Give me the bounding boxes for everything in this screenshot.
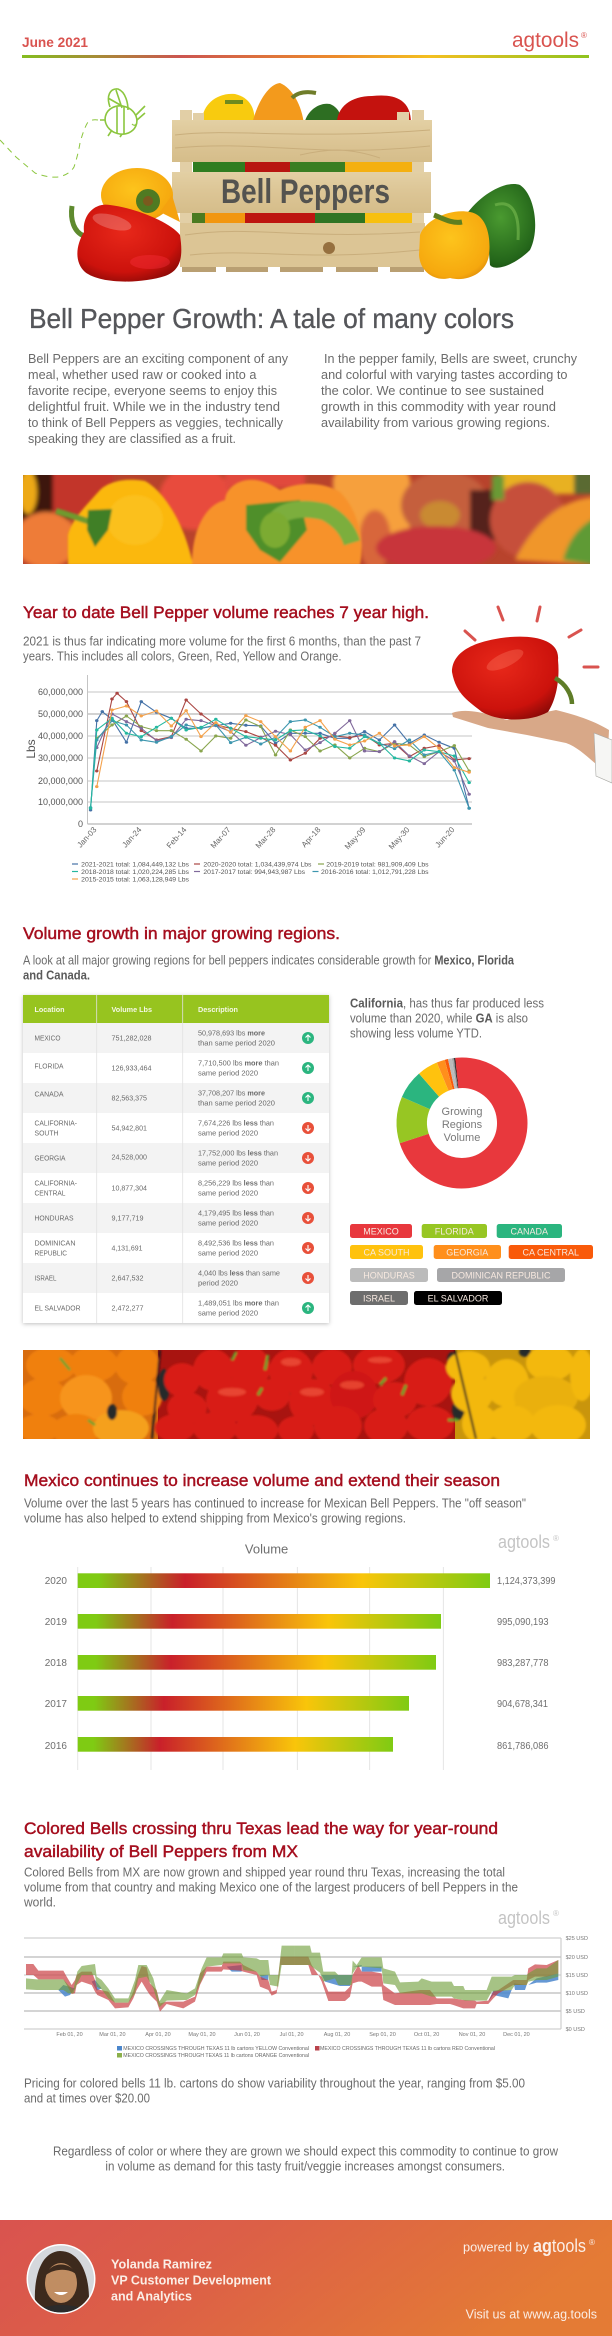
description column: than same period 2020 — [198, 1040, 275, 1048]
description column: than same period 2020 — [198, 1100, 275, 1108]
illustration: hand holding red pepper — [452, 607, 612, 783]
location column: SOUTH — [34, 1130, 58, 1138]
y axis labels — [38, 687, 83, 829]
area chart: carton pricing — [24, 1908, 588, 2059]
section text: growing regions: A look at all major growing regions for bell peppers indicates considerable growth for Mexico, Florida — [23, 954, 515, 968]
header rule — [22, 55, 589, 58]
volume column: 24,528,000 — [112, 1154, 147, 1162]
yellow peppers — [444, 1350, 590, 1439]
section base colours — [23, 1350, 590, 1439]
chart legend: 2016-2016 total: 1,012,791,228 Lbs — [321, 869, 429, 876]
donut legend pills: GEORGIA — [446, 1247, 488, 1257]
y axis labels: 0 — [78, 819, 83, 829]
author name and role: VP Customer Development — [111, 2274, 272, 2288]
header — [22, 29, 589, 58]
description column: 8,492,536 lbs less than — [198, 1240, 274, 1248]
closing statement: Regardless of color or where they are grown we should expect this commodity to continue to grow — [53, 2144, 559, 2158]
crate label: Bell Peppers — [221, 173, 390, 211]
chart legend — [117, 2046, 495, 2059]
x axis labels: Sep 01, 20 — [369, 2032, 396, 2038]
x axis labels: Oct 01, 20 — [414, 2032, 439, 2038]
volume column: 4,131,691 — [112, 1246, 143, 1252]
pepper — [452, 637, 559, 720]
description column: 17,752,000 lbs less than — [198, 1150, 278, 1158]
chart legend: 2015-2015 total: 1,063,128,949 Lbs — [81, 876, 189, 884]
description column: same period 2020 — [198, 1190, 258, 1198]
volume column: 54,942,801 — [112, 1126, 147, 1132]
price bands: January to June — [26, 1946, 295, 2012]
dark gaps — [107, 1347, 531, 1420]
location column: REPUBLIC — [34, 1250, 67, 1258]
x axis labels: Feb-14 — [165, 825, 189, 850]
description column: same period 2020 — [198, 1160, 258, 1168]
hero image: crate of bell peppers — [72, 83, 535, 282]
description column: 8,256,229 lbs less than — [198, 1180, 274, 1188]
watermark: ® — [553, 1534, 559, 1543]
x axis labels: Jan-24 — [120, 825, 144, 850]
author name and role: and Analytics — [111, 2290, 192, 2304]
x axis labels: Mar 01, 20 — [99, 2032, 126, 2038]
donut legend pills: HONDURAS — [363, 1270, 415, 1280]
description column: 7,710,500 lbs more than — [198, 1060, 279, 1068]
x axis labels: Jan-03 — [75, 825, 99, 850]
y axis labels: 60,000,000 — [38, 687, 83, 697]
chart legend: MEXICO CROSSINGS THROUGH TEXAS 11 lb cartons RED Conventional — [320, 2046, 495, 2052]
x axis labels: Nov 01, 20 — [459, 2032, 485, 2038]
icon: bee with dashed flight path — [0, 89, 145, 177]
description column — [198, 1030, 280, 1318]
powered by logo: agtools — [533, 2236, 586, 2256]
section text: year to date: 2021 is thus far indicating more volume for the first 6 months, than the past 7 — [23, 634, 421, 648]
table header — [23, 995, 329, 1023]
donut centre label: Volume — [444, 1132, 480, 1144]
x axis labels: May-30 — [387, 825, 412, 851]
location column: EL SALVADOR — [34, 1306, 80, 1312]
x axis labels: Aug 01, 20 — [324, 2032, 350, 2038]
section text: Texas crossings: world. — [23, 1896, 56, 1910]
author name and role: Yolanda Ramirez — [111, 2258, 212, 2272]
intro text: right column — [321, 351, 577, 430]
chart legend: MEXICO CROSSINGS THROUGH TEXAS 11 lb cartons YELLOW Conventional — [123, 2046, 309, 2052]
author photo — [26, 2244, 96, 2314]
intro text: right column: and colorful with varying tastes according to — [321, 367, 568, 382]
chart axes and grid — [88, 675, 472, 824]
table body — [23, 995, 329, 1323]
location column: CALIFORNIA- — [34, 1180, 78, 1188]
intro text: left column: delightful fruit. While we in the industry tend — [28, 399, 280, 414]
pricing note — [24, 2076, 525, 2106]
pepper highlight — [484, 645, 526, 675]
photo banner: close-up peppers — [23, 475, 590, 564]
powered by logo: powered by — [463, 2240, 529, 2254]
y axis labels: $10 USD — [566, 1991, 588, 1997]
green pepper — [466, 184, 535, 268]
main title: Bell Pepper Growth: A tale of many colors — [29, 303, 514, 334]
section text: growing regions: and Canada. — [23, 968, 90, 982]
watermark: agtools — [498, 1532, 550, 1552]
y axis labels: $25 USD — [566, 1936, 588, 1942]
chart legend: 2019-2019 total: 981,909,409 Lbs — [326, 862, 429, 868]
trend icons — [302, 1032, 314, 1314]
value labels: 1,124,373,399 — [497, 1576, 556, 1587]
volume column: 751,282,028 — [112, 1036, 152, 1042]
section heading: year to date: Year to date Bell Pepper volume reaches 7 year high. — [23, 603, 429, 622]
pepper stem — [555, 678, 572, 704]
x axis labels: May-09 — [343, 825, 368, 851]
section text: Mexico — [24, 1496, 526, 1526]
x axis labels: Mar-07 — [209, 825, 233, 850]
volume column: 2,647,532 — [112, 1276, 144, 1282]
peppers visible through slats — [192, 160, 412, 224]
intro text: right column: availability from various growing regions. — [321, 415, 550, 430]
intro text: left column: Bell Peppers are an exciting component of any — [28, 351, 288, 366]
description column: same period 2020 — [198, 1250, 258, 1258]
x axis labels: Jun 01, 20 — [234, 2032, 260, 2038]
section text: Mexico: Volume over the last 5 years has continued to increase for Mexican Bell Peppers. The "off season" — [24, 1496, 526, 1510]
y axis labels: 30,000,000 — [38, 753, 83, 763]
location column: HONDURAS — [34, 1216, 74, 1222]
description column: same period 2020 — [198, 1070, 258, 1078]
donut legend pills: CA SOUTH — [363, 1247, 410, 1257]
burst rays — [465, 607, 598, 667]
donut legend pills: MEXICO — [363, 1226, 399, 1236]
crate slats — [172, 120, 432, 272]
date: June 2021 — [22, 35, 88, 50]
bar chart: Mexico volume — [45, 1532, 559, 1770]
chart legend: MEXICO CROSSINGS THROUGH TEXAS 11 lb cartons ORANGE Conventional — [123, 2053, 309, 2059]
chart legend: 2018-2018 total: 1,020,224,285 Lbs — [81, 869, 189, 876]
author name and role — [111, 2258, 272, 2304]
section heading: Texas crossings — [24, 1819, 498, 1861]
x axis labels: Feb 01, 20 — [56, 2032, 83, 2038]
crate posts — [180, 110, 424, 225]
location column: CENTRAL — [34, 1190, 66, 1198]
description column: 7,674,226 lbs less than — [198, 1120, 274, 1128]
year labels — [45, 1576, 67, 1752]
x axis labels: Dec 01, 20 — [503, 2032, 530, 2038]
description column: 4,040 lbs less than same — [198, 1270, 280, 1278]
donut legend pills: DOMINICAN REPUBLIC — [451, 1270, 551, 1280]
photo banner: market peppers — [23, 1350, 590, 1439]
side text: California note: California, has thus far produced less — [350, 996, 544, 1010]
donut chart: growing regions volume — [391, 1052, 533, 1194]
intro text: left column: favorite recipe, everyone seems to enjoy this — [28, 383, 277, 398]
donut legend pills: CANADA — [511, 1226, 548, 1236]
x axis labels: Apr 01, 20 — [145, 2032, 171, 2038]
volume column: 10,877,304 — [112, 1186, 147, 1192]
chart legend: 2021-2021 total: 1,084,449,132 Lbs — [81, 862, 189, 868]
data series — [91, 693, 469, 810]
cuff — [594, 733, 612, 783]
x axis labels: Mar-28 — [254, 825, 278, 850]
chart legend — [72, 862, 429, 884]
section heading: Texas crossings: Colored Bells crossing thru Texas lead the way for year-round — [24, 1819, 498, 1838]
donut legend pills — [350, 1224, 593, 1305]
x axis labels: Apr-18 — [300, 825, 323, 849]
year labels: 2020 — [45, 1576, 67, 1587]
yellow pepper — [419, 211, 490, 279]
chart title: Volume — [245, 1542, 288, 1556]
donut legend pills: FLORIDA — [435, 1226, 474, 1236]
y axis title: Lbs — [24, 739, 38, 759]
closing statement: in volume as demand for this tasty fruit/veggie increases amongst consumers. — [105, 2160, 505, 2174]
y axis labels: 10,000,000 — [38, 797, 83, 807]
location column: CANADA — [34, 1092, 64, 1098]
y axis labels: $15 USD — [566, 1973, 588, 1979]
description column: 50,978,693 lbs more — [198, 1030, 265, 1038]
section heading: Mexico: Mexico continues to increase volume and extend their season — [24, 1471, 500, 1490]
pricing note: and at times over $20.00 — [24, 2092, 150, 2106]
volume column: 9,177,719 — [112, 1216, 144, 1222]
intro text: left column — [28, 351, 288, 446]
top peppers — [202, 83, 411, 125]
section text: year to date — [23, 634, 421, 664]
location column: GEORGIA — [34, 1156, 66, 1162]
website: Visit us at www.ag.tools — [466, 2306, 597, 2322]
y axis labels: 40,000,000 — [38, 731, 83, 741]
volume column: 126,933,464 — [112, 1066, 152, 1072]
intro text: right column: the color. We continue to see sustained — [321, 383, 544, 398]
x axis labels: May 01, 20 — [188, 2032, 216, 2038]
side text: California note — [350, 996, 544, 1040]
description column: same period 2020 — [198, 1220, 258, 1228]
intro text: left column: speaking they are classified as a fruit. — [28, 431, 236, 446]
table header: Description — [198, 1007, 238, 1014]
red highlights — [218, 1357, 392, 1396]
powered by logo — [463, 2236, 595, 2256]
chart legend: 2017-2017 total: 994,943,987 Lbs — [203, 869, 305, 876]
value labels: 904,678,341 — [497, 1699, 548, 1710]
chart legend: 2020-2020 total: 1,034,439,974 Lbs — [203, 862, 312, 868]
donut legend pills: CA CENTRAL — [523, 1247, 579, 1257]
volume column: 82,563,375 — [112, 1096, 147, 1102]
line chart: weekly volume — [24, 675, 472, 884]
section heading: Texas crossings: availability of Bell Peppers from MX — [24, 1842, 298, 1861]
y axis labels — [566, 1936, 588, 2033]
y axis labels: 20,000,000 — [38, 776, 83, 786]
powered by logo: ® — [589, 2238, 595, 2247]
pricing note: Pricing for colored bells 11 lb. cartons do show variability throughout the year, ranging from $5.00 — [24, 2076, 525, 2090]
table header: Location — [34, 1007, 64, 1014]
description column: same period 2020 — [198, 1130, 258, 1138]
value labels: 983,287,778 — [497, 1658, 549, 1669]
row stripes — [23, 1023, 329, 1293]
agtools logo: ® — [581, 31, 587, 40]
section text: growing regions — [23, 954, 515, 982]
location column: CALIFORNIA- — [34, 1120, 78, 1128]
year labels: 2017 — [45, 1699, 67, 1710]
intro text: right column: growth in this commodity with year round — [321, 399, 556, 414]
y axis labels: 50,000,000 — [38, 709, 83, 719]
side text: California note: volume than 2020, while GA is also — [350, 1012, 528, 1026]
description column: 37,708,207 lbs more — [198, 1090, 265, 1098]
donut legend pills: EL SALVADOR — [428, 1293, 489, 1303]
red pepper — [72, 205, 181, 282]
watermark: ® — [553, 1909, 559, 1918]
intro text: right column: In the pepper family, Bells are sweet, crunchy — [324, 351, 577, 366]
location column: DOMINICAN — [34, 1240, 76, 1248]
table: volume by location — [23, 995, 329, 1323]
price bands: July to December — [295, 1946, 558, 2008]
value labels: 861,786,086 — [497, 1741, 549, 1752]
y axis labels: $5 USD — [566, 2009, 585, 2015]
section text: Texas crossings: volume from that country and making Mexico one of the largest producers of bell Peppers in the — [24, 1880, 518, 1894]
section text: Mexico: volume has also helped to extend shipping from Mexico's growing regions. — [24, 1512, 406, 1526]
side text: California note: showing less volume YTD. — [350, 1026, 482, 1040]
section heading: growing regions: Volume growth in major growing regions. — [23, 924, 340, 943]
year labels: 2019 — [45, 1617, 67, 1628]
footer — [0, 2220, 612, 2336]
x axis labels: Jun-20 — [433, 825, 457, 850]
x axis labels: Jul 01, 20 — [280, 2032, 304, 2038]
green stems and dividers — [60, 1352, 458, 1425]
location column — [34, 1036, 80, 1312]
intro text: left column: meal, whether used raw or cooked into a — [28, 367, 257, 382]
donut legend pills: ISRAEL — [363, 1293, 395, 1303]
description column: 4,179,495 lbs less than — [198, 1210, 274, 1218]
x axis labels — [56, 2032, 530, 2038]
y axis labels: $0 USD — [566, 2027, 585, 2033]
section text: Texas crossings: Colored Bells from MX are now grown and shipped year round thru Texas, increasing the total — [24, 1866, 505, 1880]
agtools logo: agtools — [512, 29, 579, 52]
orange pepper — [101, 168, 180, 222]
intro text: left column: to think of Bell Peppers as veggies, technically — [28, 415, 283, 430]
red peppers — [155, 1346, 454, 1446]
volume column: 2,472,277 — [112, 1306, 144, 1312]
description column: period 2020 — [198, 1280, 238, 1288]
volume column — [112, 1036, 152, 1312]
location column: FLORIDA — [34, 1064, 64, 1070]
arm — [452, 710, 609, 773]
donut centre label: Regions — [442, 1119, 483, 1131]
section text: Texas crossings — [23, 1866, 518, 1910]
section text: year to date: years. This includes all colors, Green, Red, Yellow and Orange. — [23, 650, 342, 664]
orange peppers — [23, 1350, 164, 1439]
year labels: 2016 — [45, 1741, 67, 1752]
year labels: 2018 — [45, 1658, 67, 1669]
value labels — [497, 1576, 556, 1752]
description column: same period 2020 — [198, 1310, 258, 1318]
donut centre label: Growing — [442, 1106, 482, 1118]
y axis labels: $20 USD — [566, 1955, 588, 1961]
location column: ISRAEL — [34, 1276, 57, 1282]
value labels: 995,090,193 — [497, 1617, 549, 1628]
x axis labels — [75, 825, 457, 851]
location column: MEXICO — [34, 1036, 61, 1042]
bars — [78, 1573, 490, 1752]
description column: 1,489,051 lbs more than — [198, 1300, 279, 1308]
table header: Volume Lbs — [112, 1007, 152, 1014]
donut centre label — [442, 1106, 483, 1144]
watermark: agtools — [498, 1908, 550, 1928]
closing statement — [53, 2144, 559, 2174]
